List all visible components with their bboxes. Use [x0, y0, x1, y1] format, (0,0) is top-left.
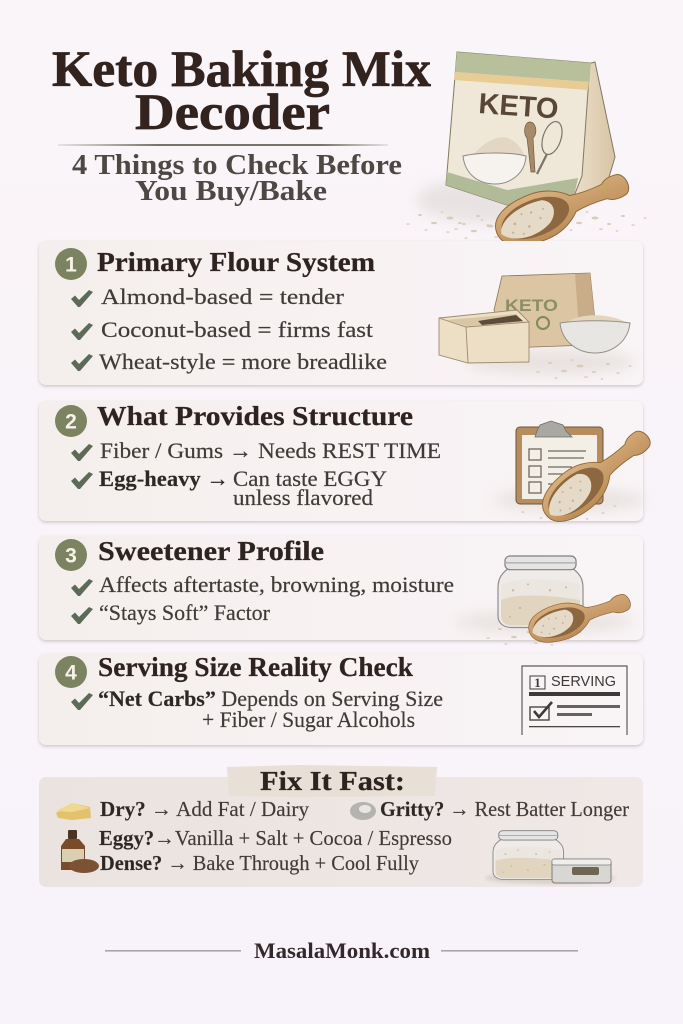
- checklist: [71, 572, 454, 625]
- icon: serving label: [522, 666, 627, 735]
- subtitle: 4 Things to Check Before: [72, 149, 402, 181]
- illustration: clipboard and scoop: [495, 419, 661, 532]
- heading band: [227, 765, 437, 797]
- icon: foil disc: [350, 802, 376, 820]
- checklist: [71, 284, 387, 374]
- checklist: [71, 438, 441, 510]
- icon: vanilla bottle and nut: [61, 830, 99, 873]
- subtitle: You Buy/Bake: [135, 175, 327, 207]
- number badge 3: 3: [65, 544, 77, 568]
- checklist: + Fiber / Sugar Alcohols: [202, 707, 415, 732]
- number badge 3: [55, 539, 87, 571]
- illustration: box, bag, bowl: KETO: [505, 296, 558, 315]
- icon: serving label: SERVING: [551, 673, 616, 690]
- subtitle: [72, 149, 402, 207]
- heading: Primary Flour System: [97, 247, 376, 277]
- number badge 1: 1: [65, 254, 77, 276]
- checklist: Affects aftertaste, browning, moisture: [99, 572, 454, 597]
- tip: dry: Dry? → Add Fat / Dairy: [100, 797, 309, 821]
- tip: eggy: Eggy?→Vanilla + Salt + Cocoa / Espresso: [99, 826, 452, 850]
- heading: Sweetener Profile: [98, 536, 324, 566]
- heading: Serving Size Reality Check: [98, 652, 413, 682]
- checklist: Almond-based = tender: [101, 284, 345, 309]
- number badge 1: [55, 248, 87, 280]
- icon: serving label: 1: [534, 675, 541, 690]
- heading band: Fix It Fast:: [260, 766, 405, 796]
- checklist: Fiber / Gums → Needs REST TIME: [100, 438, 441, 463]
- title: Decoder: [135, 85, 330, 141]
- panel: fix it fast: [39, 765, 643, 887]
- checklist: unless flavored: [233, 485, 373, 510]
- tip: gritty: Gritty? → Rest Batter Longer: [380, 797, 629, 821]
- illustration: keto bag with scoop: KETO: [478, 88, 560, 126]
- illustration: jar and scoop: [455, 556, 635, 649]
- title: [52, 42, 431, 141]
- number badge 4: 4: [65, 662, 77, 684]
- icon: butter: [56, 803, 91, 820]
- tip: dense: Dense? → Bake Through + Cool Fully: [100, 851, 419, 875]
- panel: sweetener profile: [39, 536, 643, 649]
- checklist: “Stays Soft” Factor: [99, 600, 270, 625]
- panel: serving size reality check: [39, 652, 643, 745]
- checklist: “Net Carbs” Depends on Serving Size: [98, 686, 443, 711]
- number badge 2: [55, 405, 87, 437]
- checklist: Can taste EGGY: [233, 466, 387, 491]
- checklist: [71, 686, 443, 732]
- panel: what provides structure: [39, 401, 661, 532]
- heading: What Provides Structure: [97, 401, 413, 431]
- number badge 4: [55, 656, 87, 688]
- panel: primary flour system: [39, 241, 643, 385]
- checklist: Coconut-based = firms fast: [101, 317, 374, 342]
- footer: MasalaMonk.com: [254, 938, 430, 963]
- illustration: box, bag, bowl: [439, 273, 635, 380]
- number badge 2: 2: [65, 410, 77, 434]
- checklist: Wheat-style = more breadlike: [99, 349, 387, 374]
- checklist: Egg-heavy →: [99, 466, 229, 491]
- illustration: jar and tin: [485, 831, 615, 884]
- title: Keto Baking Mix: [52, 42, 431, 98]
- illustration: keto bag with scoop: [406, 52, 646, 255]
